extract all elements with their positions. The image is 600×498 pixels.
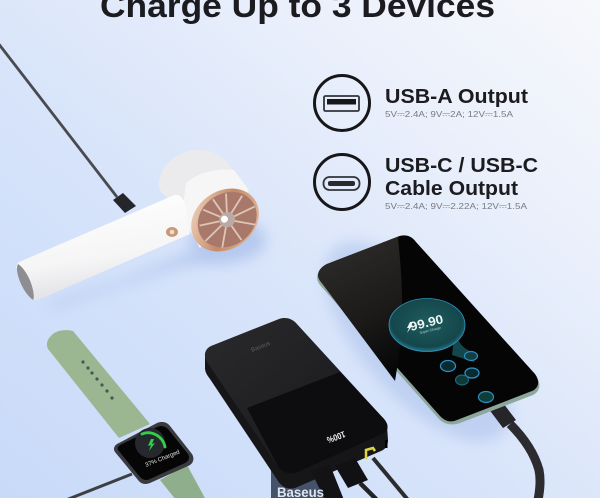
yellow port xyxy=(366,448,375,459)
text: USB-C output xyxy=(385,155,538,211)
handheld fan xyxy=(16,150,271,306)
text: USB-A output xyxy=(385,86,528,119)
logo: Baseus xyxy=(251,341,271,354)
watermark box xyxy=(271,458,324,498)
phone shadow xyxy=(293,212,542,471)
smartwatch: 37% Charged xyxy=(145,450,181,469)
text: USB-A output: 5V⎓2.4A; 9V⎓2A; 12V⎓1.5A xyxy=(385,109,513,119)
text: USB-A output: USB-A Output xyxy=(385,86,528,108)
fan face xyxy=(179,176,271,264)
fan cable xyxy=(0,43,136,213)
icon: USB-C port xyxy=(314,154,370,210)
smartphone xyxy=(317,235,539,424)
icon: USB-A port xyxy=(314,76,370,130)
power bank xyxy=(205,318,388,489)
fan handle xyxy=(16,195,190,300)
phone cable xyxy=(488,403,540,498)
text: USB-C output: Cable Output xyxy=(385,178,518,200)
battery display: 100% xyxy=(325,429,347,445)
text: USB-C output: 5V⎓2.4A; 9V⎓2.22A; 12V⎓1.5A xyxy=(385,201,527,211)
charging bubble: Super Charge xyxy=(419,326,441,335)
smartwatch xyxy=(114,422,193,484)
text: USB-C output: USB-C / USB-C xyxy=(385,155,538,177)
fan head xyxy=(159,150,249,248)
watch cable xyxy=(66,474,132,498)
watch band xyxy=(47,330,206,498)
charging bubble: 99.90 xyxy=(408,312,445,334)
power bank cables xyxy=(311,458,408,498)
charging bubble xyxy=(389,298,494,402)
